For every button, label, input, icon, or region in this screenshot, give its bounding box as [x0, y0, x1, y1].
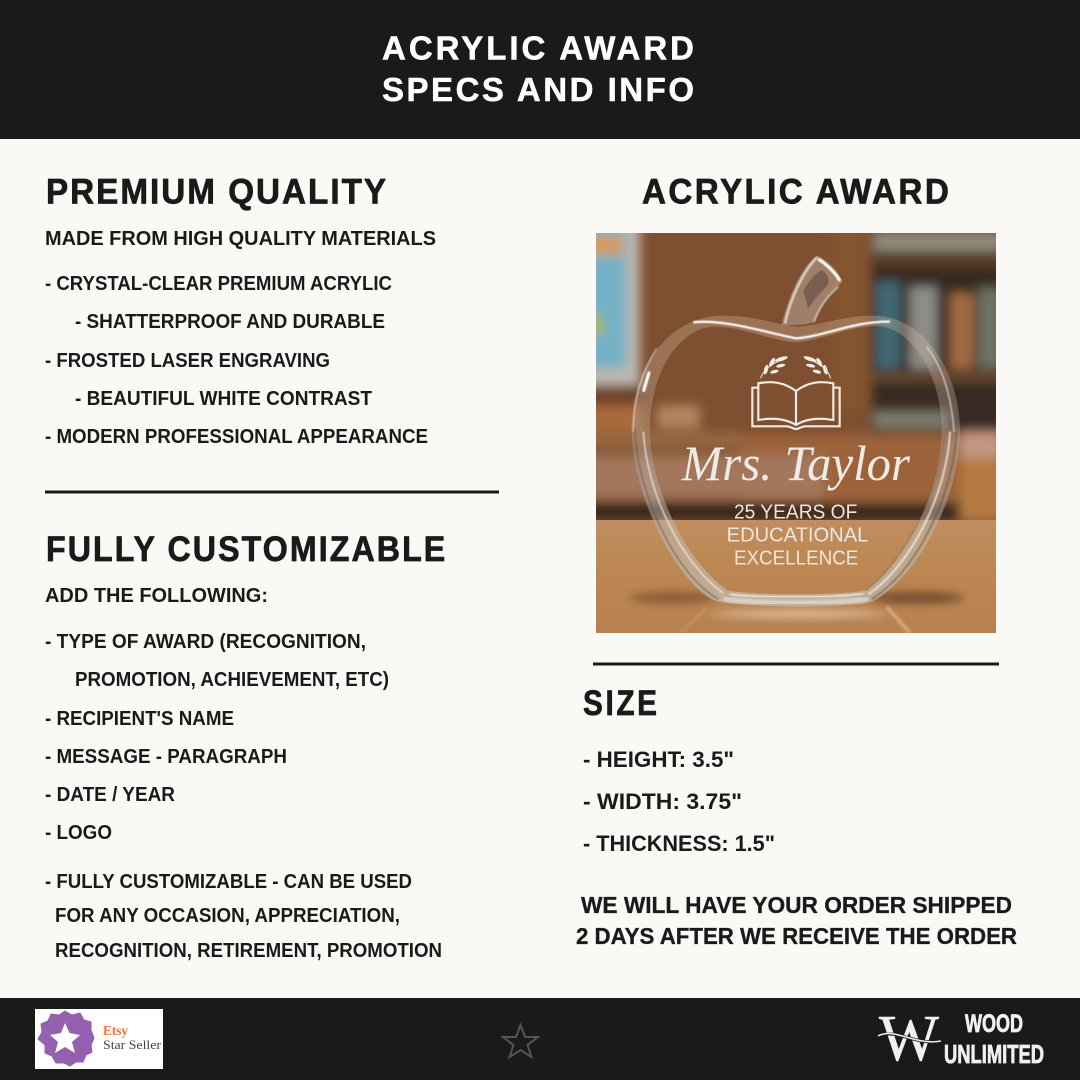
icon: w monogram: W [879, 1002, 940, 1075]
text block: customization list [45, 584, 442, 962]
photo: engraved acrylic apple award [583, 218, 1005, 633]
title: SPECS AND INFO [382, 71, 694, 108]
apple stem [782, 256, 842, 325]
heading: acrylic award: ACRYLIC AWARD [642, 173, 949, 212]
engraved name: Mrs. Taylor [681, 435, 911, 491]
panel: premium quality [45, 173, 436, 448]
text block: customization list: - RECIPIENT'S NAME [45, 707, 234, 730]
text block: customization list: - DATE / YEAR [45, 783, 175, 806]
text block: customization list: FOR ANY OCCASION, APPRECIATION, [55, 904, 400, 927]
engraved message [728, 504, 868, 564]
callout: shipping note: 2 DAYS AFTER WE RECEIVE THE ORDER [576, 923, 1017, 949]
text block: materials list: - FROSTED LASER ENGRAVING [45, 349, 330, 372]
engraved message: EXCELLENCE [734, 547, 858, 570]
text block: materials list: - CRYSTAL-CLEAR PREMIUM ACRYLIC [45, 272, 392, 295]
heading: premium quality: PREMIUM QUALITY [46, 173, 386, 212]
text block: dimensions: - THICKNESS: 1.5" [583, 831, 775, 856]
icon: open book [752, 382, 840, 429]
apple body [632, 316, 960, 606]
text block: materials list [45, 227, 436, 448]
text block: materials list: - MODERN PROFESSIONAL APPEARANCE [45, 425, 428, 448]
text block: customization list: - TYPE OF AWARD (RECOGNITION, [45, 630, 366, 653]
header band [0, 0, 1080, 139]
panel: fully customizable [45, 531, 445, 962]
text block: customization list: - LOGO [45, 821, 112, 844]
panel: size [583, 684, 775, 856]
badge: etsy star seller: Etsy [103, 1024, 128, 1039]
icon: outlined star [503, 1025, 538, 1057]
logo: wood unlimited [878, 1002, 1044, 1075]
text block: customization list: - FULLY CUSTOMIZABLE - CAN BE USED [45, 870, 412, 893]
heading: fully customizable: FULLY CUSTOMIZABLE [46, 531, 445, 569]
text block: dimensions: - WIDTH: 3.75" [583, 789, 742, 814]
text block: customization list: - MESSAGE - PARAGRAPH [45, 745, 287, 768]
icon: laurel leaves [761, 355, 831, 378]
text block: customization list: RECOGNITION, RETIREMENT, PROMOTION [55, 939, 442, 962]
callout: shipping note [576, 892, 1017, 949]
text block: materials list: - BEAUTIFUL WHITE CONTRAST [75, 387, 372, 410]
text block: dimensions [583, 747, 775, 856]
icon: purple rosette star [38, 1011, 94, 1066]
engraved message: EDUCATIONAL [727, 524, 868, 547]
text block: customization list: PROMOTION, ACHIEVEMENT, ETC) [75, 668, 389, 691]
engraved message: 25 YEARS OF [734, 500, 857, 523]
heading: size: SIZE [583, 684, 657, 723]
wordmark [944, 1010, 1044, 1069]
title [382, 30, 694, 108]
wordmark: WOOD [965, 1010, 1023, 1038]
text block: materials list: MADE FROM HIGH QUALITY MATERIALS [45, 227, 436, 250]
text block: customization list: ADD THE FOLLOWING: [45, 584, 268, 607]
photo background [583, 218, 1005, 633]
badge: etsy star seller [35, 1009, 163, 1069]
callout: shipping note: WE WILL HAVE YOUR ORDER SHIPPED [581, 892, 1012, 918]
text block: dimensions: - HEIGHT: 3.5" [583, 747, 734, 772]
text block: materials list: - SHATTERPROOF AND DURABLE [75, 310, 385, 333]
title: ACRYLIC AWARD [382, 30, 694, 66]
footer band [0, 998, 1080, 1080]
badge: etsy star seller: Star Seller [103, 1037, 162, 1052]
